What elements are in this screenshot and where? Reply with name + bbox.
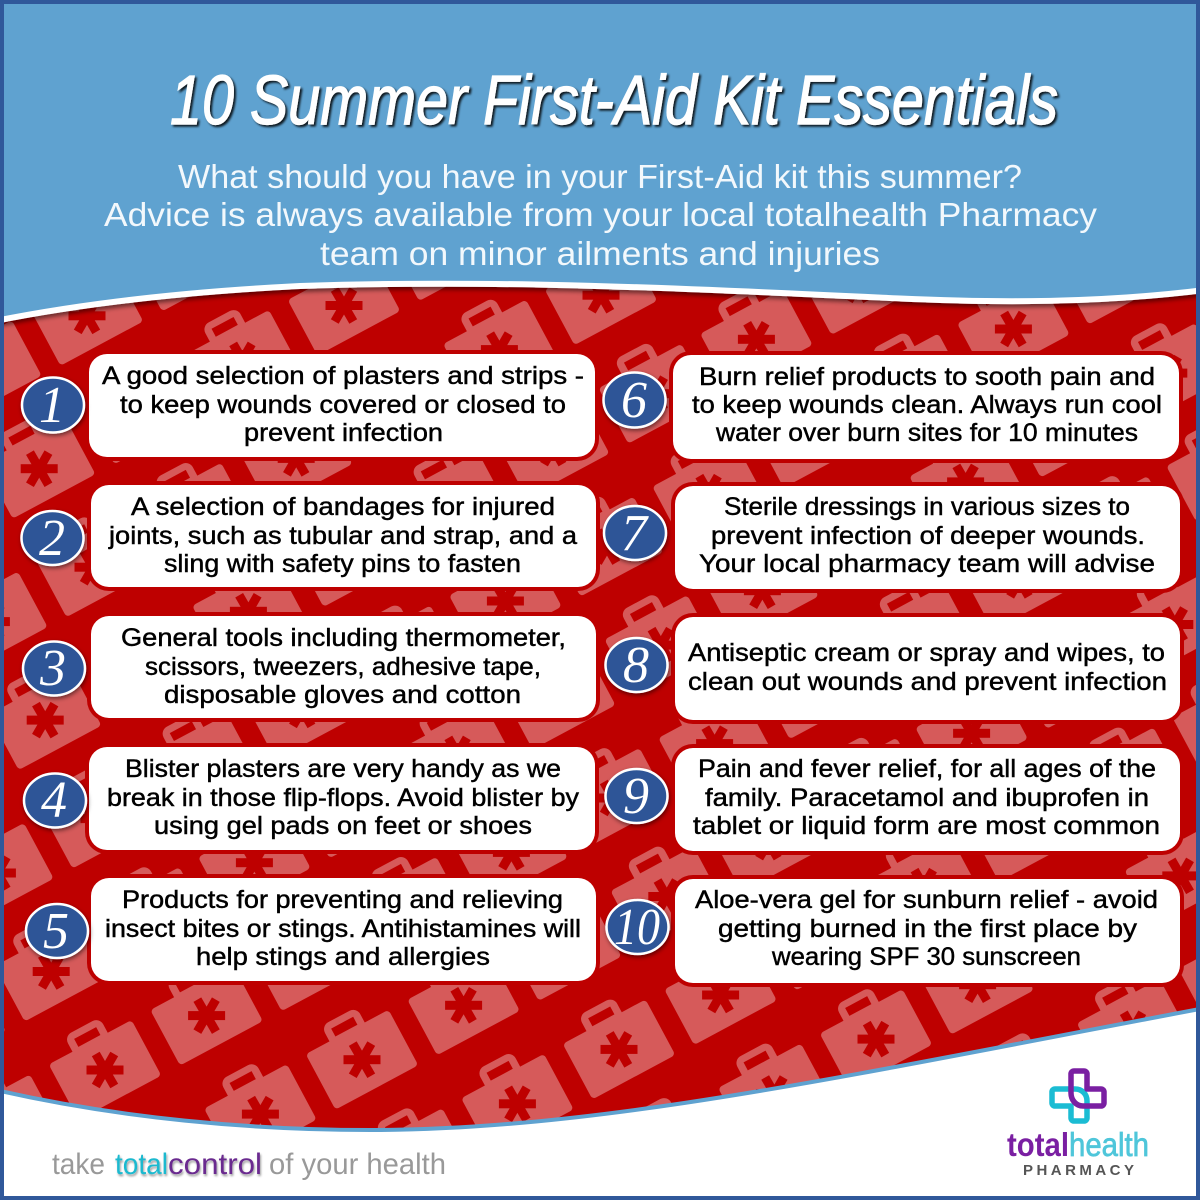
card 8: [671, 613, 1184, 724]
tagline: [52, 1148, 446, 1181]
number badge 2: [22, 510, 84, 567]
number badge 3: [23, 640, 85, 697]
number badge 2: 2: [39, 510, 65, 567]
number badge 4: [24, 772, 86, 829]
card 4: using gel pads on feet or shoes: [154, 812, 532, 840]
logo wordmark 2: health: [1069, 1126, 1149, 1163]
item 7: [604, 482, 1184, 593]
footer panel: [0, 1009, 1200, 1200]
subtitle: What should you have in your First-Aid kit this summer?: [178, 158, 1022, 195]
number badge 6: 6: [621, 372, 647, 429]
card 1: prevent infection: [244, 419, 443, 447]
number badge 7: [604, 505, 666, 562]
card 10: Aloe-vera gel for sunburn relief - avoid: [695, 886, 1158, 914]
card 7: [671, 482, 1184, 593]
tagline: control: [168, 1148, 262, 1181]
subtitle: [104, 158, 1098, 272]
card 6: Burn relief products to sooth pain and: [699, 363, 1155, 391]
card 5: insect bites or stings. Antihistamines will: [105, 915, 581, 943]
number badge 6: [604, 372, 666, 429]
number badge 8: [606, 637, 668, 694]
card 3: General tools including thermometer,: [121, 624, 566, 652]
item 2: [22, 481, 600, 591]
card 2: A selection of bandages for injured: [131, 493, 555, 521]
number badge 5: 5: [43, 903, 69, 960]
card 1: to keep wounds covered or closed to: [120, 391, 566, 419]
card 4: [85, 743, 599, 854]
card 9: Pain and fever relief, for all ages of the: [698, 755, 1156, 783]
card 5: Products for preventing and relieving: [122, 886, 563, 914]
number badge 1: 1: [39, 377, 65, 434]
card 10: getting burned in the first place by: [718, 915, 1138, 943]
card 4: break in those flip-flops. Avoid blister by: [107, 784, 580, 812]
number badge 4: 4: [41, 772, 67, 829]
item 10: [606, 875, 1184, 987]
card 8: clean out wounds and prevent infection: [688, 668, 1167, 696]
number badge 8: 8: [623, 637, 649, 694]
item 6: [604, 351, 1183, 463]
card 8: Antiseptic cream or spray and wipes, to: [688, 639, 1165, 667]
card 5: help stings and allergies: [196, 943, 490, 971]
card 7: Your local pharmacy team will advise: [699, 550, 1155, 578]
logo subtitle: PHARMACY: [1023, 1162, 1134, 1179]
card 2: sling with safety pins to fasten: [164, 550, 521, 578]
card 3: [87, 612, 600, 722]
card 10: wearing SPF 30 sunscreen: [771, 943, 1081, 971]
number badge 9: [606, 768, 668, 825]
icon: interlocked cross: [1052, 1071, 1104, 1121]
card 1: [85, 350, 599, 461]
tagline: take: [52, 1148, 105, 1181]
card 3: scissors, tweezers, adhesive tape,: [145, 653, 541, 681]
subtitle: team on minor ailments and injuries: [320, 235, 880, 272]
card 7: prevent infection of deeper wounds.: [711, 522, 1145, 550]
logo wordmark: total: [1007, 1126, 1069, 1163]
card 3: disposable gloves and cotton: [164, 681, 521, 709]
tagline: total: [115, 1148, 168, 1181]
card 9: family. Paracetamol and ibuprofen in: [705, 784, 1149, 812]
item 4: [24, 743, 599, 854]
number badge 5: [26, 903, 88, 960]
item 8: [606, 613, 1184, 724]
card 6: water over burn sites for 10 minutes: [715, 419, 1138, 447]
tagline: of your health: [269, 1148, 446, 1181]
number badge 7: 7: [621, 505, 649, 562]
item 3: [23, 612, 600, 722]
logo: totalhealth pharmacy: [1007, 1071, 1149, 1179]
number badge 3: 3: [39, 640, 66, 697]
card 10: [671, 875, 1184, 987]
card 5: [87, 874, 600, 985]
header panel: [0, 0, 1200, 321]
number badge 1: [22, 377, 84, 434]
card 9: [671, 744, 1184, 855]
item 1: [22, 350, 599, 461]
card 1: A good selection of plasters and strips -: [102, 362, 584, 390]
item 9: [606, 744, 1184, 855]
card 9: tablet or liquid form are most common: [693, 812, 1160, 840]
number badge 9: 9: [623, 768, 649, 825]
subtitle: Advice is always available from your local totalhealth Pharmacy: [104, 196, 1098, 233]
number badge 10: 10: [614, 899, 660, 956]
card 7: Sterile dressings in various sizes to: [724, 493, 1130, 521]
card 6: [669, 351, 1183, 463]
card 4: Blister plasters are very handy as we: [125, 755, 561, 783]
card 2: joints, such as tubular and strap, and a: [108, 522, 577, 550]
card 2: [87, 481, 600, 591]
card 6: to keep wounds clean. Always run cool: [692, 391, 1162, 419]
item 5: [26, 874, 600, 985]
background: red panel: [0, 270, 1200, 1140]
